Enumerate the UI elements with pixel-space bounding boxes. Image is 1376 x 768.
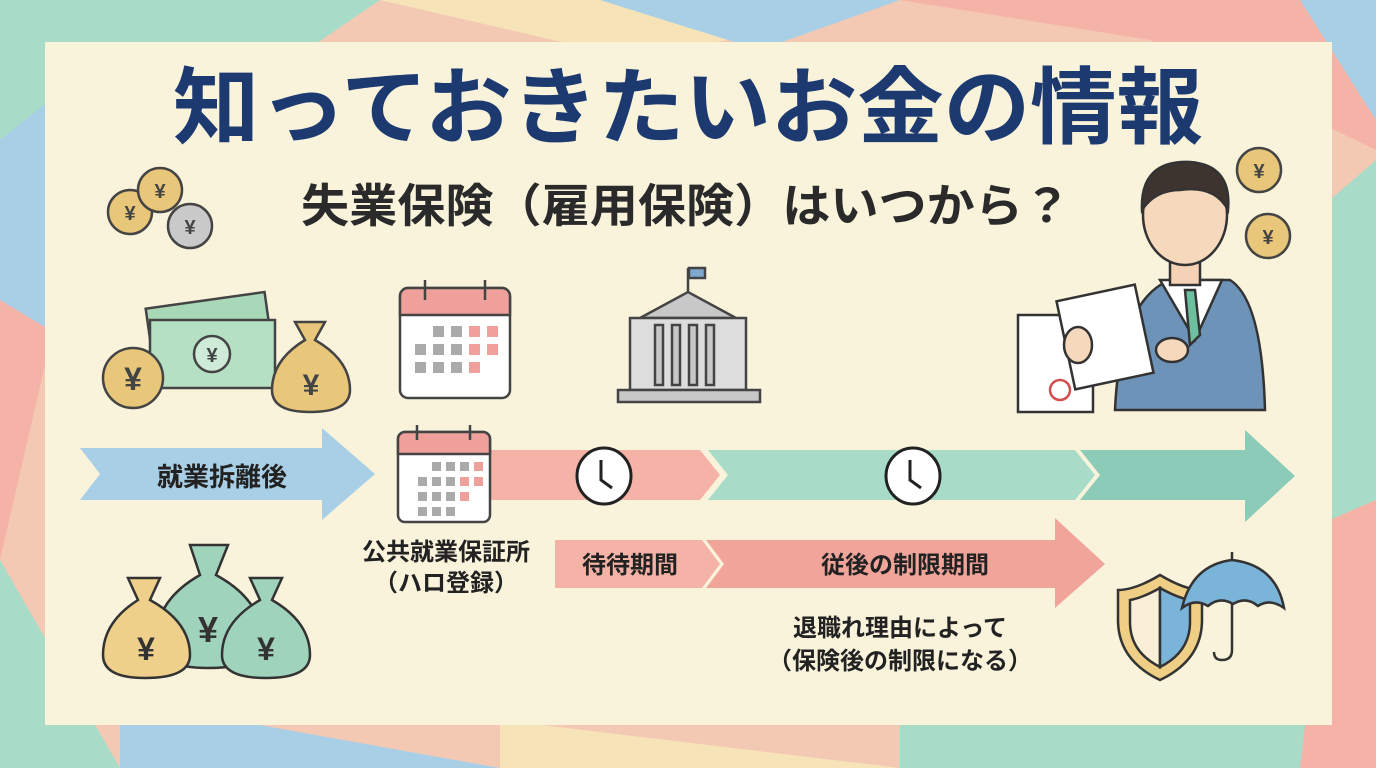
icon: cash and money bag: ¥ bbox=[206, 345, 218, 367]
icon: calendar top bbox=[400, 280, 510, 398]
arrow: 従後の制限期間 bbox=[706, 518, 1105, 608]
icon: money bags bottom-left: ¥ bbox=[137, 631, 155, 667]
arrow: 待待期間: 待待期間 bbox=[582, 552, 678, 579]
icon: businessman with document bbox=[1018, 162, 1265, 412]
icon: coins top-left: ¥ bbox=[124, 203, 136, 225]
icon: coins top-left bbox=[108, 168, 212, 248]
icon: coins top-right: ¥ bbox=[1262, 227, 1274, 249]
icon: clock 1 bbox=[577, 448, 631, 504]
title: 知っておきたいお金の情報 bbox=[173, 61, 1203, 155]
arrow: 就業拆離後: 就業拆離後 bbox=[157, 462, 287, 492]
icon: money bags bottom-left bbox=[103, 545, 310, 678]
label: 公共就業保証所 bbox=[362, 539, 530, 597]
icon: money bags bottom-left: ¥ bbox=[257, 631, 275, 667]
icon: government building bbox=[618, 268, 760, 402]
icon: shield and umbrella bbox=[1118, 552, 1284, 680]
icon: money bags bottom-left: ¥ bbox=[198, 609, 218, 650]
icon: coins top-right bbox=[1237, 148, 1290, 258]
note text bbox=[768, 615, 1032, 675]
arrow: green upper bbox=[708, 450, 1095, 500]
arrow: 待待期間 bbox=[555, 540, 720, 588]
icon: cash and money bag: ¥ bbox=[303, 369, 320, 402]
arrow: pink upper bbox=[490, 450, 720, 500]
subtitle: 失業保険（雇用保険）はいつから？ bbox=[301, 180, 1071, 232]
note text: （保険後の制限になる） bbox=[768, 648, 1032, 675]
icon: calendar lower bbox=[398, 425, 490, 522]
arrow: 就業拆離後 bbox=[80, 428, 375, 520]
note text: 退職れ理由によって bbox=[793, 615, 1007, 642]
arrow: 従後の制限期間: 従後の制限期間 bbox=[821, 552, 989, 579]
icon: coins top-left: ¥ bbox=[184, 217, 196, 239]
icon: cash and money bag bbox=[103, 292, 350, 412]
label: 公共就業保証所: 公共就業保証所 bbox=[362, 539, 530, 566]
arrow: teal final bbox=[1080, 430, 1295, 522]
icon: clock 2 bbox=[886, 448, 940, 504]
label: 公共就業保証所: （ハロ登録） bbox=[374, 570, 518, 597]
icon: cash and money bag: ¥ bbox=[124, 361, 142, 397]
icon: coins top-right: ¥ bbox=[1253, 161, 1265, 183]
icon: coins top-left: ¥ bbox=[154, 181, 166, 203]
